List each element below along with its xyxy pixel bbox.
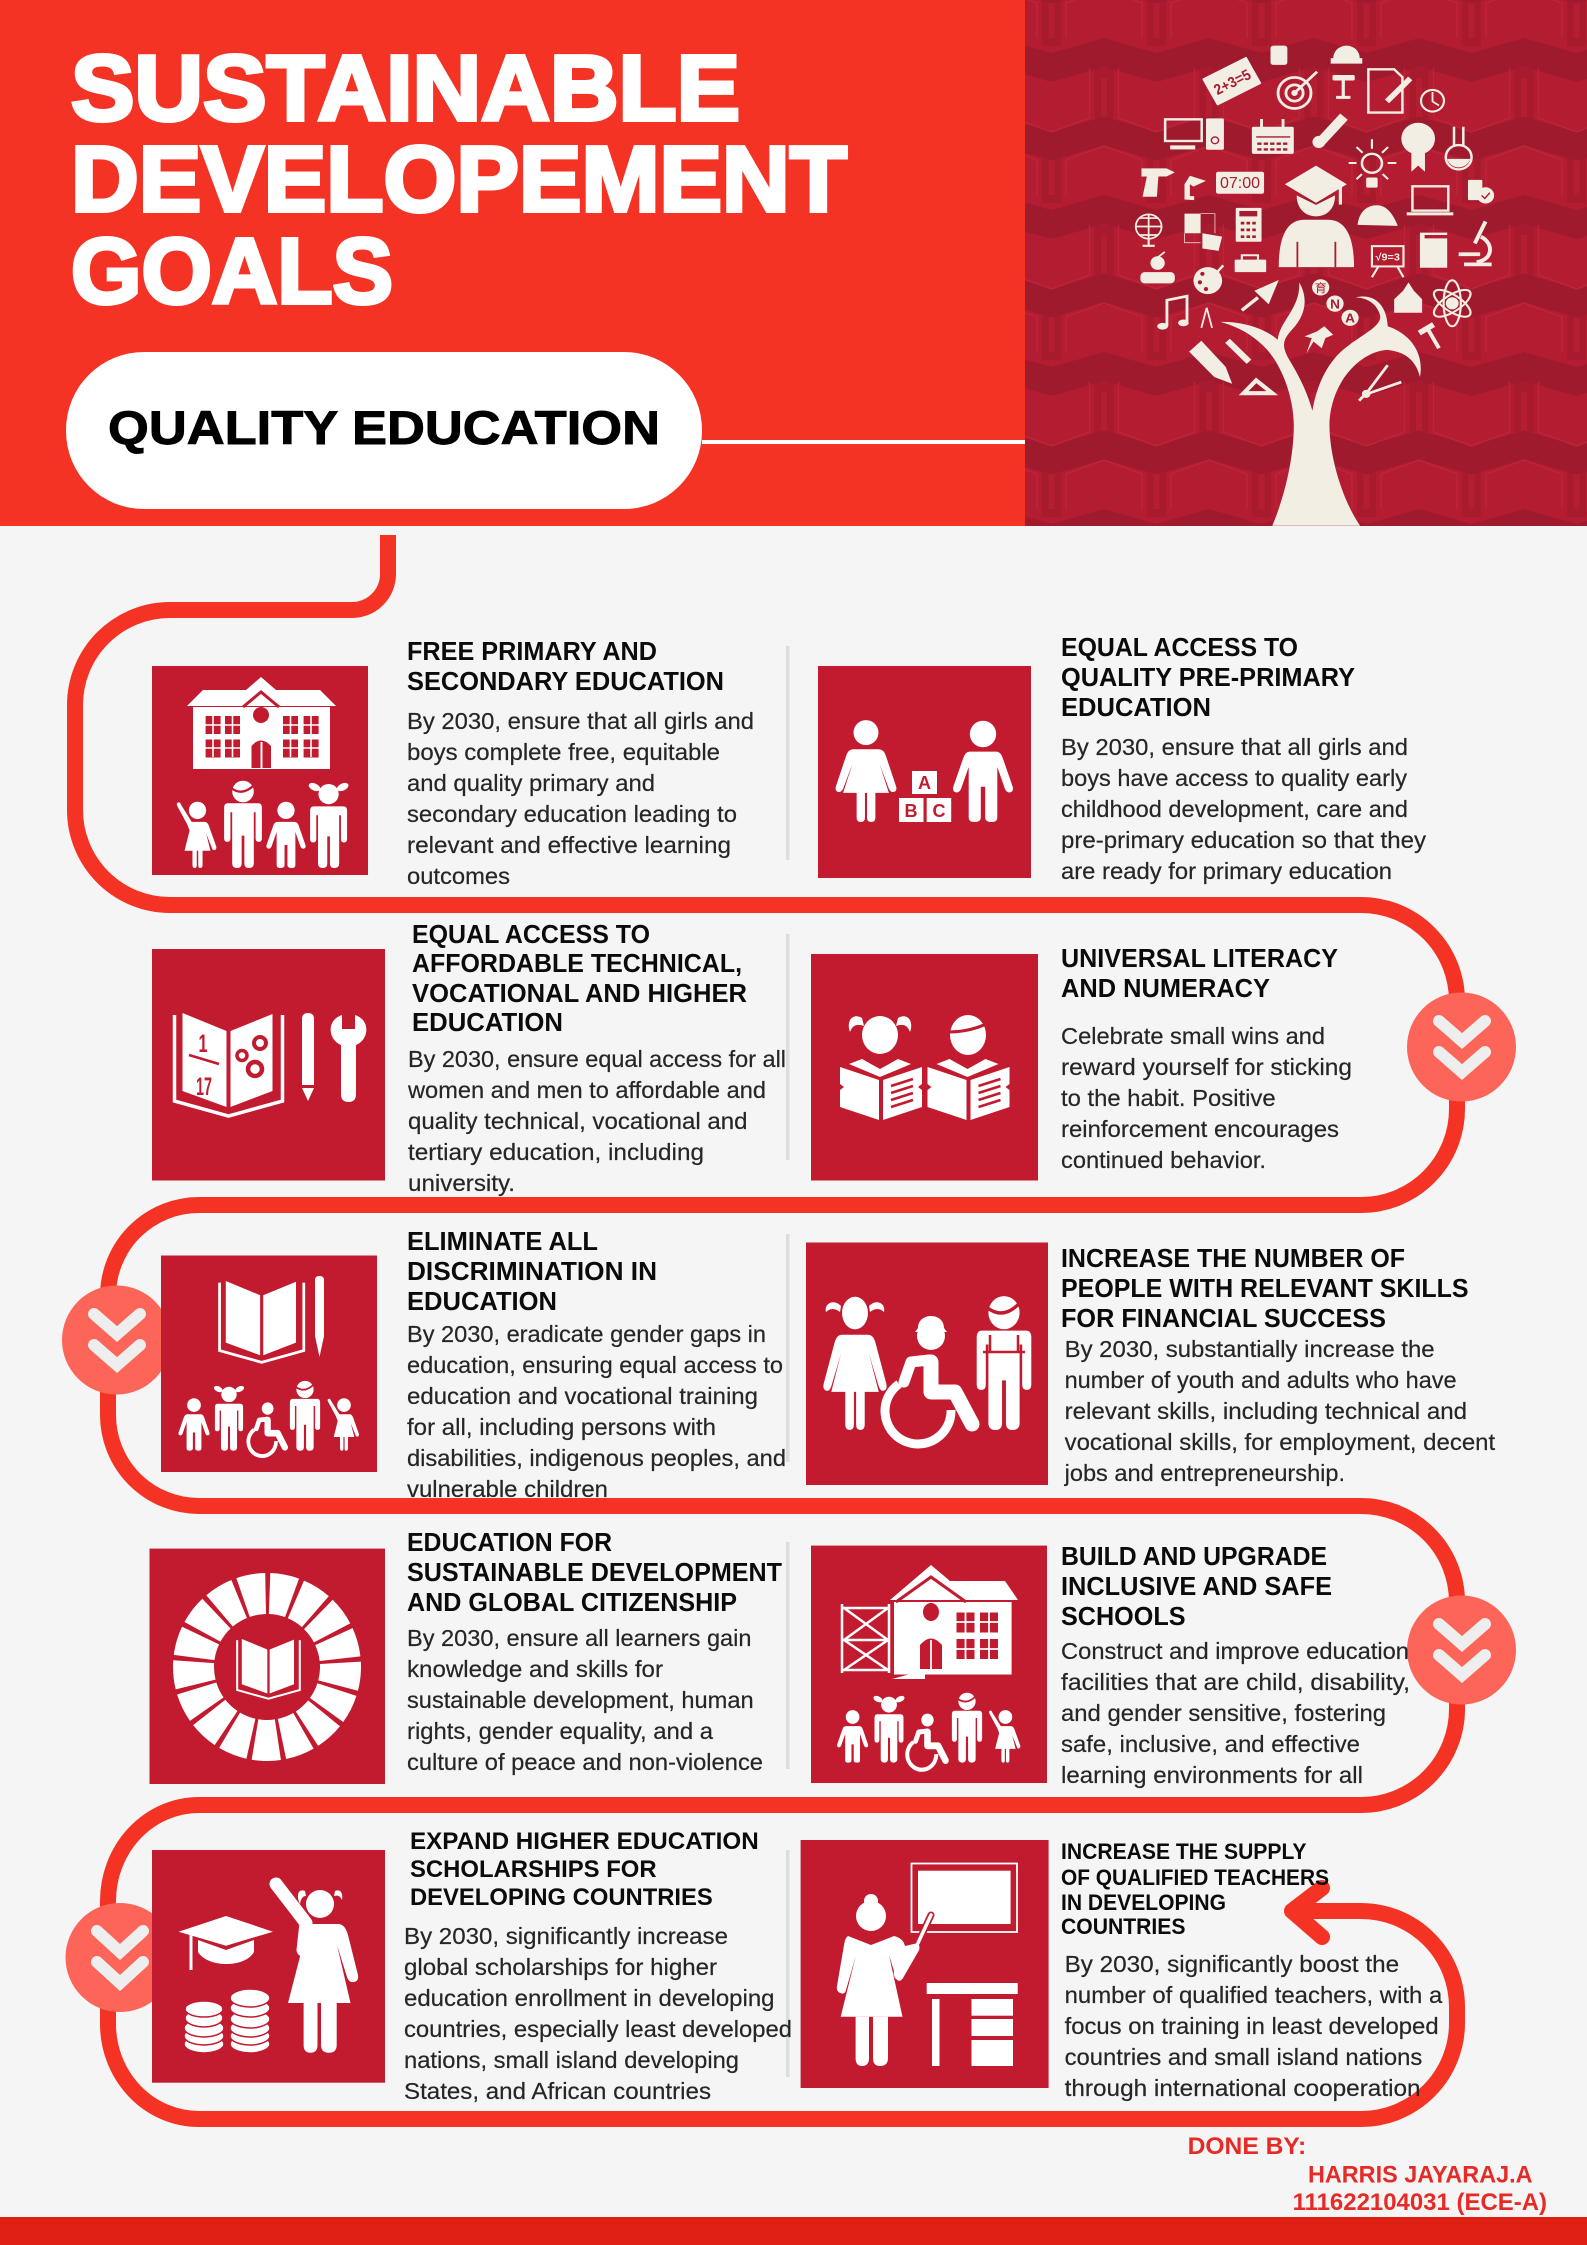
description: learning environments for all bbox=[1061, 1762, 1363, 1788]
description: disabilities, indigenous peoples, and bbox=[407, 1445, 786, 1471]
heading: DEVELOPING COUNTRIES bbox=[410, 1884, 713, 1911]
description bbox=[407, 1046, 786, 1196]
description bbox=[407, 708, 754, 889]
header image: education tree bbox=[1025, 0, 1587, 526]
heading bbox=[407, 638, 724, 696]
description: reward yourself for sticking bbox=[1061, 1054, 1352, 1080]
heading: OF QUALIFIED TEACHERS bbox=[1061, 1865, 1329, 1890]
heading: SUSTAINABLE DEVELOPMENT bbox=[407, 1559, 782, 1587]
description: jobs and entrepreneurship. bbox=[1064, 1460, 1345, 1486]
icon: school with children bbox=[152, 666, 368, 875]
icon: book, pencil and wrench: 17 bbox=[196, 1073, 212, 1101]
icon: children with alphabet blocks: A bbox=[918, 773, 931, 793]
icon: SDG ring with book bbox=[150, 1549, 385, 1784]
icon: doctor, wheelchair worker and mechanic bbox=[806, 1242, 1048, 1485]
icon: two children reading bbox=[811, 954, 1038, 1180]
heading: EDUCATION bbox=[412, 1009, 563, 1037]
small education icons: √9=3 bbox=[1376, 252, 1400, 263]
description: By 2030, substantially increase the bbox=[1065, 1336, 1435, 1362]
small education icons: 2+3=5 bbox=[1211, 66, 1255, 99]
icon: children with alphabet blocks: B bbox=[904, 801, 918, 821]
description bbox=[1061, 734, 1427, 884]
description: through international cooperation bbox=[1065, 2075, 1421, 2101]
heading bbox=[1061, 634, 1355, 722]
heading: COUNTRIES bbox=[1061, 1914, 1186, 1939]
credits: 111622104031 (ECE-A) bbox=[1293, 2189, 1547, 2216]
subtitle pill: QUALITY EDUCATION bbox=[108, 401, 660, 454]
description: By 2030, ensure that all girls and bbox=[1061, 734, 1408, 760]
description: knowledge and skills for bbox=[407, 1656, 663, 1682]
icon: children with alphabet blocks bbox=[818, 666, 1031, 878]
description: education and vocational training bbox=[407, 1383, 758, 1409]
heading: FOR FINANCIAL SUCCESS bbox=[1061, 1305, 1386, 1333]
heading bbox=[407, 1228, 657, 1316]
title bbox=[71, 36, 847, 323]
heading: EXPAND HIGHER EDUCATION bbox=[410, 1828, 759, 1855]
description: By 2030, ensure equal access for all bbox=[408, 1046, 786, 1072]
heading bbox=[410, 1828, 759, 1911]
heading: INCREASE THE SUPPLY bbox=[1061, 1839, 1307, 1864]
description: tertiary education, including bbox=[408, 1139, 704, 1165]
heading: BUILD AND UPGRADE bbox=[1061, 1543, 1327, 1571]
description: reinforcement encourages bbox=[1061, 1116, 1339, 1142]
small education icons: A bbox=[1345, 311, 1355, 325]
arrowhead at end of pathway bbox=[1292, 1888, 1322, 1937]
heading: EDUCATION FOR bbox=[407, 1529, 612, 1557]
panel: universal literacy and numeracy bbox=[811, 945, 1352, 1180]
chevron marker right row 2 bbox=[1407, 992, 1516, 1102]
chevron marker left row 3 bbox=[62, 1286, 171, 1394]
credits: HARRIS JAYARAJ.A bbox=[1308, 2162, 1532, 2189]
description: nations, small island developing bbox=[404, 2047, 739, 2073]
description: focus on training in least developed bbox=[1065, 2013, 1439, 2039]
heading: EQUAL ACCESS TO bbox=[1061, 634, 1298, 662]
description: By 2030, significantly boost the bbox=[1065, 1951, 1399, 1977]
heading: IN DEVELOPING bbox=[1061, 1890, 1226, 1915]
description: and quality primary and bbox=[407, 770, 655, 796]
description: safe, inclusive, and effective bbox=[1061, 1731, 1360, 1757]
heading: FREE PRIMARY AND bbox=[407, 638, 657, 666]
heading bbox=[1061, 1839, 1329, 1939]
heading: ELIMINATE ALL bbox=[407, 1228, 598, 1256]
icon: book, pencil and wrench bbox=[152, 949, 385, 1180]
panel: relevant skills for financial success bbox=[806, 1242, 1496, 1486]
description: By 2030, eradicate gender gaps in bbox=[407, 1321, 766, 1347]
heading: INCREASE THE NUMBER OF bbox=[1061, 1245, 1405, 1273]
description bbox=[1064, 1336, 1496, 1486]
chevron marker left row 5 bbox=[66, 1903, 174, 2012]
description: countries and small island nations bbox=[1065, 2044, 1422, 2070]
title: GOALS bbox=[71, 219, 393, 323]
description: relevant and effective learning bbox=[407, 832, 731, 858]
description bbox=[1061, 1023, 1352, 1173]
heading: UNIVERSAL LITERACY bbox=[1061, 945, 1338, 973]
panel: education for sustainable development bbox=[150, 1529, 782, 1784]
description: Celebrate small wins and bbox=[1061, 1023, 1325, 1049]
header bbox=[0, 0, 1026, 526]
description: By 2030, ensure all learners gain bbox=[407, 1625, 752, 1651]
description: countries, especially least developed bbox=[404, 2016, 792, 2042]
description: Construct and improve education bbox=[1061, 1638, 1409, 1664]
icon: girl with graduation cap and coins bbox=[152, 1850, 385, 2083]
description: global scholarships for higher bbox=[404, 1954, 717, 1980]
panel: build and upgrade schools bbox=[811, 1543, 1410, 1788]
credits: DONE BY: bbox=[1188, 2133, 1306, 2160]
panel: eliminate all discrimination bbox=[161, 1228, 786, 1502]
description: relevant skills, including technical and bbox=[1065, 1398, 1467, 1424]
panel: supply of qualified teachers bbox=[801, 1839, 1443, 2101]
description: continued behavior. bbox=[1061, 1147, 1266, 1173]
connector line from pill bbox=[702, 440, 1025, 444]
description: quality technical, vocational and bbox=[408, 1108, 748, 1134]
flowing red pathway line bbox=[75, 535, 1457, 2119]
heading: AND GLOBAL CITIZENSHIP bbox=[407, 1589, 737, 1617]
panel: equal access to pre-primary education bbox=[818, 634, 1427, 884]
credits bbox=[1188, 2133, 1547, 2216]
heading: INCLUSIVE AND SAFE bbox=[1061, 1573, 1332, 1601]
description: secondary education leading to bbox=[407, 801, 737, 827]
panel: free primary and secondary education bbox=[152, 638, 754, 889]
subtitle pill bbox=[66, 352, 702, 509]
description: pre-primary education so that they bbox=[1061, 827, 1427, 853]
description: education, ensuring equal access to bbox=[407, 1352, 783, 1378]
heading: PEOPLE WITH RELEVANT SKILLS bbox=[1061, 1275, 1469, 1303]
icon: book, pencil and diverse learners bbox=[161, 1256, 377, 1472]
description: rights, gender equality, and a bbox=[407, 1718, 713, 1744]
description bbox=[404, 1923, 792, 2104]
heading: QUALITY PRE-PRIMARY bbox=[1061, 664, 1355, 692]
heading bbox=[412, 921, 747, 1037]
description: number of qualified teachers, with a bbox=[1065, 1982, 1443, 2008]
description: By 2030, ensure that all girls and bbox=[407, 708, 754, 734]
icon: children with alphabet blocks: C bbox=[932, 801, 946, 821]
description: By 2030, significantly increase bbox=[404, 1923, 728, 1949]
description: sustainable development, human bbox=[407, 1687, 754, 1713]
heading: SCHOOLS bbox=[1061, 1603, 1186, 1631]
heading: EQUAL ACCESS TO bbox=[412, 921, 650, 949]
description: facilities that are child, disability, bbox=[1061, 1669, 1410, 1695]
description: education enrollment in developing bbox=[404, 1985, 774, 2011]
description: for all, including persons with bbox=[407, 1414, 716, 1440]
description: outcomes bbox=[407, 863, 510, 889]
description bbox=[407, 1321, 786, 1502]
heading: EDUCATION bbox=[1061, 694, 1211, 722]
description: to the habit. Positive bbox=[1061, 1085, 1276, 1111]
icon: teacher at blackboard and desk bbox=[801, 1840, 1049, 2088]
small education icons: 07:00 bbox=[1220, 174, 1260, 192]
icon: school under construction with learners bbox=[811, 1546, 1047, 1783]
description: vocational skills, for employment, decent bbox=[1065, 1429, 1496, 1455]
heading: SCHOLARSHIPS FOR bbox=[410, 1856, 657, 1883]
heading: VOCATIONAL AND HIGHER bbox=[412, 980, 747, 1008]
small education icons bbox=[1136, 46, 1494, 401]
description: boys have access to quality early bbox=[1061, 765, 1408, 791]
heading: EDUCATION bbox=[407, 1288, 557, 1316]
description: boys complete free, equitable bbox=[407, 739, 720, 765]
chevron marker right row 4 bbox=[1407, 1596, 1516, 1704]
description: are ready for primary education bbox=[1061, 858, 1392, 884]
heading bbox=[1061, 1543, 1332, 1631]
student with graduation cap bbox=[1279, 166, 1354, 267]
heading bbox=[1061, 1245, 1469, 1333]
title: DEVELOPEMENT bbox=[71, 127, 847, 231]
heading: DISCRIMINATION IN bbox=[407, 1258, 657, 1286]
description bbox=[1065, 1951, 1443, 2101]
description bbox=[1061, 1638, 1410, 1788]
heading bbox=[407, 1529, 782, 1617]
description: university. bbox=[408, 1170, 515, 1196]
description: and gender sensitive, fostering bbox=[1061, 1700, 1386, 1726]
title: SUSTAINABLE bbox=[71, 36, 740, 140]
description: women and men to affordable and bbox=[407, 1077, 766, 1103]
footer bar bbox=[0, 2217, 1587, 2245]
description: States, and African countries bbox=[404, 2078, 711, 2104]
description: culture of peace and non-violence bbox=[407, 1749, 763, 1775]
heading bbox=[1061, 945, 1338, 1003]
tree trunk and branches bbox=[1220, 282, 1421, 526]
panel: technical and vocational education bbox=[152, 921, 786, 1196]
panel: expand higher education scholarships bbox=[152, 1828, 792, 2104]
description: vulnerable children bbox=[407, 1476, 608, 1502]
description: childhood development, care and bbox=[1061, 796, 1408, 822]
small education icons: N bbox=[1330, 297, 1340, 311]
description bbox=[407, 1625, 763, 1775]
heading: AFFORDABLE TECHNICAL, bbox=[412, 950, 742, 978]
heading: SECONDARY EDUCATION bbox=[407, 668, 724, 696]
small education icons: 育 bbox=[1315, 281, 1327, 295]
icon: book, pencil and wrench: 1 bbox=[198, 1030, 208, 1058]
description: number of youth and adults who have bbox=[1065, 1367, 1457, 1393]
heading: AND NUMERACY bbox=[1061, 975, 1270, 1003]
